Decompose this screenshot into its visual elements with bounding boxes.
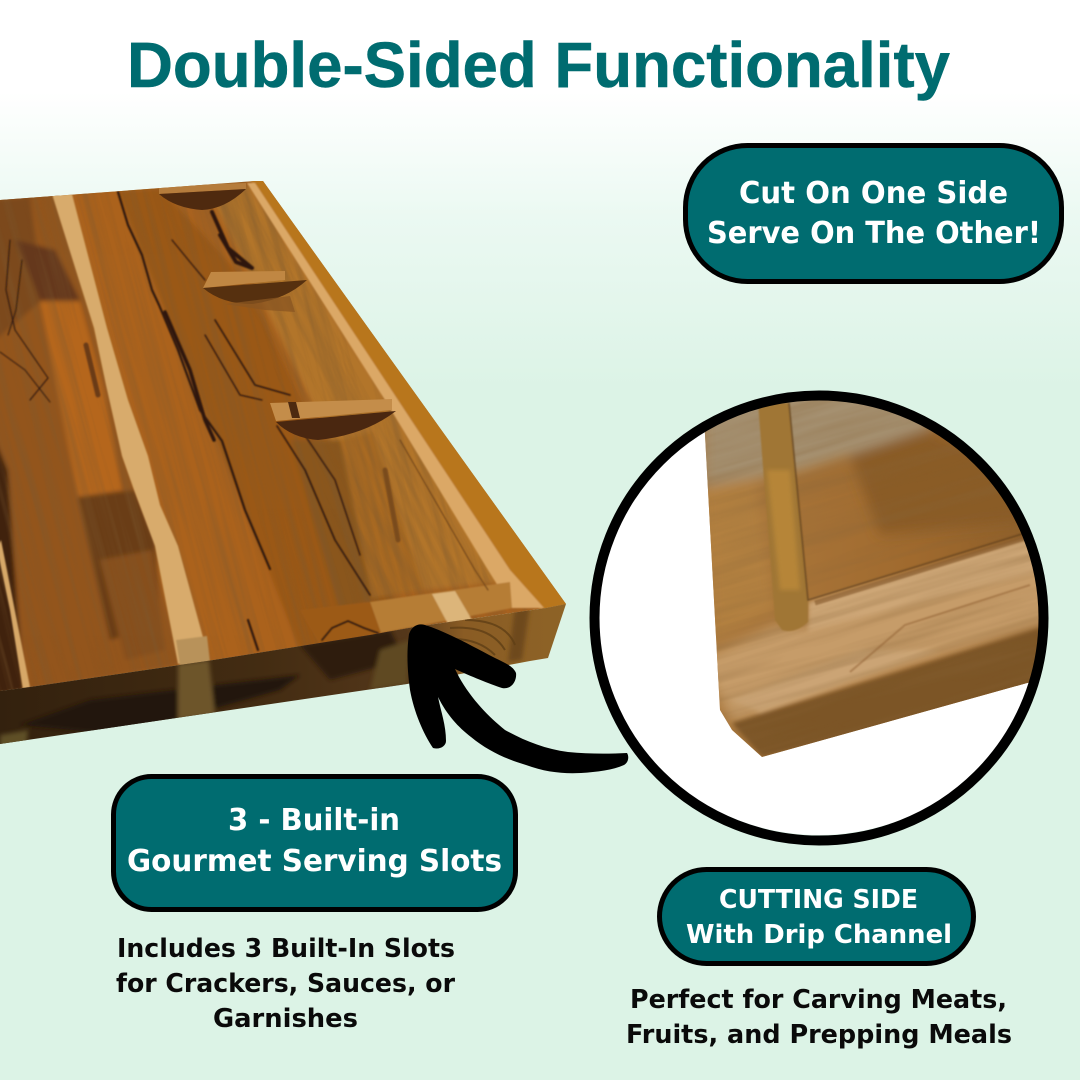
wood grain texture bbox=[0, 181, 526, 690]
callout: cutting side: CUTTING SIDE bbox=[719, 885, 918, 915]
caption: serving slots: Includes 3 Built-In Slots bbox=[117, 934, 455, 964]
right side grain bbox=[220, 204, 532, 610]
cutting side board photo bbox=[704, 400, 1038, 757]
caption: cutting side: Perfect for Carving Meats, bbox=[630, 985, 1007, 1015]
callout: serving slots: Gourmet Serving Slots bbox=[127, 844, 502, 879]
callout: cut on one side bbox=[686, 146, 1062, 282]
caption: serving slots: for Crackers, Sauces, or bbox=[116, 969, 455, 999]
callout: serving slots bbox=[114, 776, 516, 910]
caption: serving slots: Garnishes bbox=[213, 1004, 358, 1034]
grain texture bbox=[708, 400, 1038, 740]
slot 3 bbox=[270, 399, 396, 440]
callout: serving slots: 3 - Built-in bbox=[228, 803, 400, 838]
caption: cutting side bbox=[626, 985, 1012, 1050]
title: Double-Sided Functionality bbox=[127, 29, 950, 101]
curved arrow bbox=[407, 624, 628, 773]
slot 1 bbox=[159, 183, 246, 210]
board top face bbox=[0, 181, 566, 691]
board front edge bbox=[0, 600, 580, 750]
magnified circle: cutting side bbox=[590, 390, 1048, 846]
drip channel bbox=[758, 403, 1035, 631]
callout: cutting side: With Drip Channel bbox=[686, 920, 952, 950]
slot 2 bbox=[203, 271, 307, 312]
caption: cutting side: Fruits, and Prepping Meals bbox=[626, 1020, 1012, 1050]
cutting board photo: serving side bbox=[0, 181, 566, 744]
rim and stripes bbox=[0, 180, 570, 690]
callout: cut on one side: Serve On The Other! bbox=[707, 216, 1041, 251]
callout: cut on one side: Cut On One Side bbox=[739, 176, 1008, 211]
caption: serving slots bbox=[116, 934, 455, 1034]
dark grain streaks bbox=[0, 192, 488, 650]
callout: cutting side bbox=[660, 870, 974, 964]
